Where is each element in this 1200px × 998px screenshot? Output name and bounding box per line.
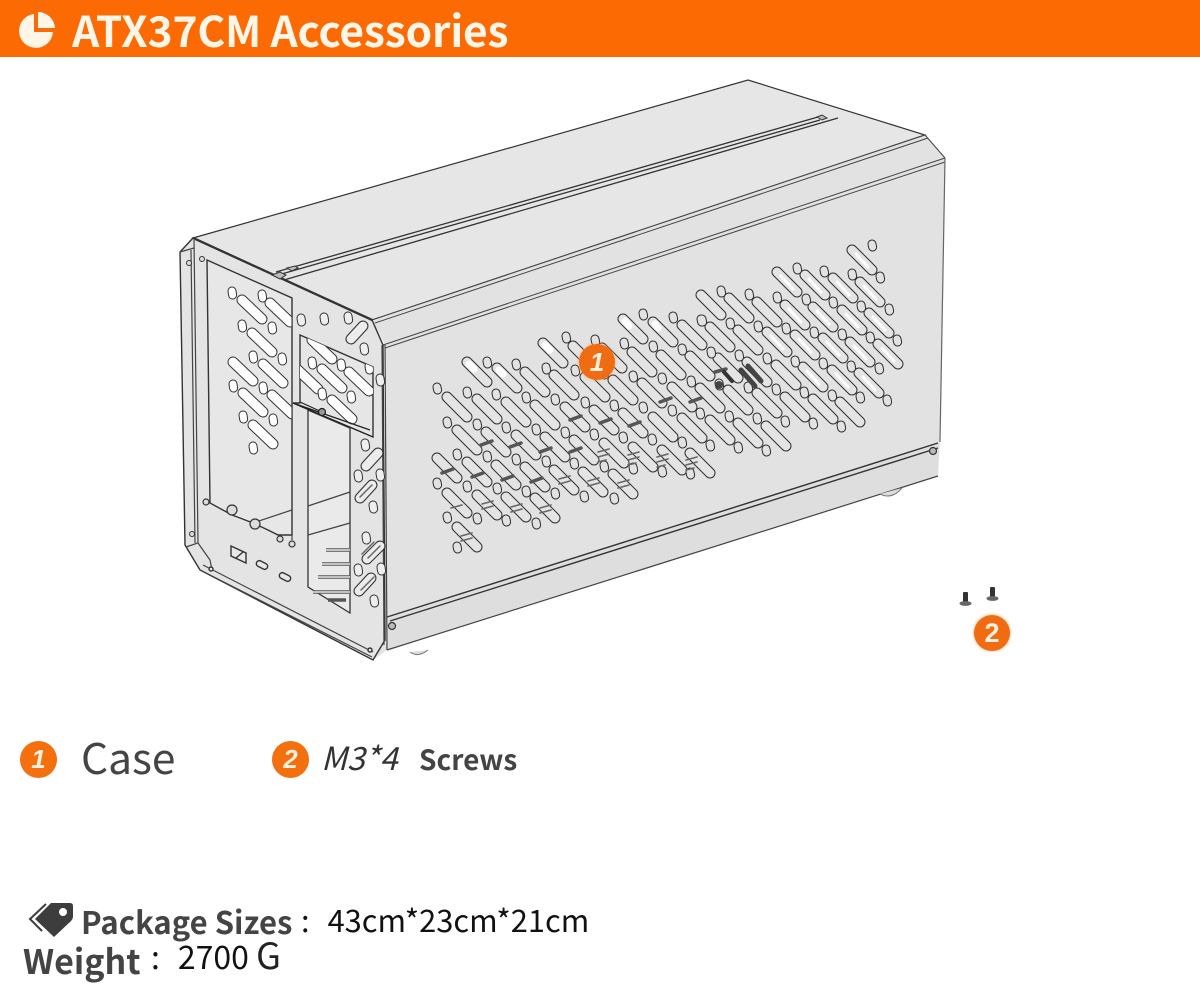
frame holes	[301, 316, 382, 603]
case: rear frame	[180, 115, 827, 660]
legend label: case: Case	[81, 726, 175, 787]
case: top panel	[193, 80, 925, 320]
badge 2 near screws	[974, 615, 1010, 651]
package sizes label: Package Sizes	[81, 898, 292, 943]
header icon: pie chart	[19, 12, 55, 48]
header band	[0, 0, 1200, 57]
icon: two M3 screws	[960, 587, 998, 606]
legend label: screws: Screws	[419, 739, 517, 779]
mounting bracket plate	[292, 298, 373, 540]
icon: price tag	[28, 903, 73, 937]
PSU opening	[308, 410, 350, 613]
legend badge 2	[272, 741, 309, 778]
case: side panel	[372, 135, 945, 660]
legend badge 2: 2	[283, 744, 298, 774]
I/O ports	[209, 546, 372, 652]
weight value: : 2700 G	[151, 928, 281, 980]
case: ventilation slots	[437, 244, 898, 549]
package sizes value: : 43cm*23cm*21cm	[301, 896, 589, 941]
badge 2 near screws: 2	[984, 618, 1000, 648]
rear window with perforation	[186, 256, 295, 547]
title: ATX37CM Accessories	[72, 0, 508, 60]
weight label: Weight	[23, 935, 141, 984]
legend badge 1: 1	[31, 744, 46, 774]
legend badge 1	[20, 741, 57, 778]
legend label: M3*4: M3*4	[321, 734, 397, 780]
badge 1 on case: 1	[590, 347, 604, 377]
illustration: ATX37CM case	[179, 79, 946, 661]
badge 1 on case	[579, 344, 615, 380]
